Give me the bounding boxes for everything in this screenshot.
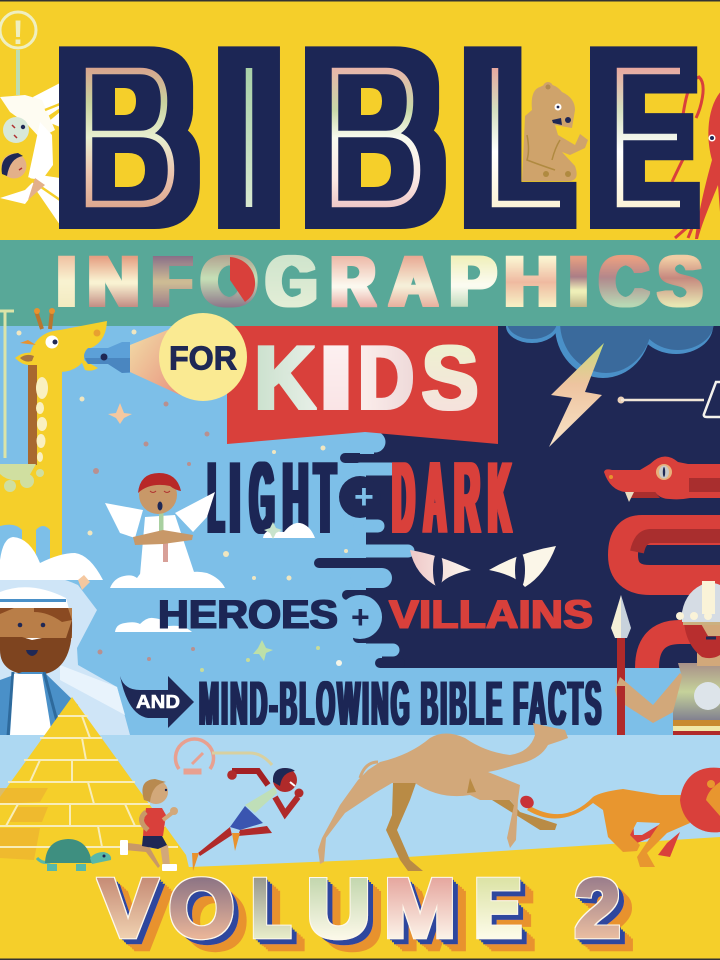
title: BIBLE: L [472,6,563,269]
illustration: turtle [37,839,111,871]
heading: INFOGRAPHICS: O [201,243,257,322]
heading: VOLUME 2: O [169,861,234,954]
icon: exclamation sign [0,12,36,95]
heading: KIDS: K [254,327,316,429]
icon: squid [672,77,720,239]
heading: INFOGRAPHICS: R [331,243,375,322]
title: BIBLE: B [312,6,436,269]
heading: INFOGRAPHICS: S [658,243,702,322]
illustration: small cloud with star [263,522,315,539]
plus sign: light and dark: + [354,478,374,516]
heading: INFOGRAPHICS: H [504,242,558,322]
heading: HEROES: HEROES [158,593,338,637]
heading: DARK: A [424,442,446,554]
illustration: pyramid [0,697,190,872]
heading: INFOGRAPHICS: P [450,241,496,321]
illustration: serpent [604,456,720,668]
heading: INFOGRAPHICS: I [57,241,76,321]
heading: KIDS [254,326,479,429]
badge: FOR [159,313,247,401]
illustration: boy running [120,779,178,871]
illustration: lion [518,768,720,867]
illustration: warrior and spear [611,581,720,736]
icon: exclamation sign: ! [12,14,24,52]
decoration: stars and dots [16,330,348,672]
heading: LIGHT [208,441,335,555]
heading: DARK [393,441,511,555]
background: yellow top [0,0,720,240]
arrow: AND [120,676,194,728]
heading: INFOGRAPHICS [57,241,702,322]
title inline strokes [89,68,680,207]
background: sky blue [0,326,720,736]
heading: INFOGRAPHICS: C [599,242,649,321]
illustration: pen and light beam [84,325,180,395]
title: BIBLE [66,6,687,269]
illustration: angels behind B [0,83,60,225]
icon: speedometer [176,739,272,773]
arrow: AND: AND [136,692,180,712]
heading: INFOGRAPHICS: N [88,243,139,322]
heading: VOLUME 2: 2 [574,862,621,954]
illustration: sprinter [192,768,304,871]
heading: LIGHT: T [315,441,335,554]
heading: KIDS: D [358,326,414,428]
title: BIBLE: E [599,8,687,269]
panel: dark side [319,326,720,668]
heading: VOLUME 2: M [384,861,456,954]
icon: bear [522,82,588,181]
heading: DARK: D [393,442,414,554]
illustration: cloud over Heroes [115,618,192,632]
heading: VOLUME 2: L [251,861,291,954]
icon: lightning bolt [549,343,604,447]
icon: pie slice in O [230,257,255,302]
plus sign: heroes and villains: + [351,599,370,635]
top edge line [0,0,720,2]
heading: KIDS: S [421,327,479,429]
heading: LIGHT: H [283,443,308,555]
heading: VOLUME 2: U [306,862,371,955]
heading: INFOGRAPHICS: A [390,242,437,322]
title: BIBLE: B [66,6,190,269]
heading: INFOGRAPHICS: G [266,243,317,322]
heading: KIDS: I [316,327,356,428]
illustration: giraffe [0,308,107,560]
badge: FOR: FOR [169,340,237,376]
illustration: camel [318,723,568,871]
heading: LIGHT: I [230,442,240,555]
heading: INFOGRAPHICS: I [569,241,588,321]
banner: KIDS [227,326,498,444]
heading: VOLUME 2 [99,861,621,955]
heading: DARK: K [488,441,511,554]
heading: DARK: R [454,443,480,555]
heading: INFOGRAPHICS: F [152,243,192,322]
title letter counters [115,88,391,187]
heading: VILLAINS: VILLAINS [389,593,593,637]
heading: MIND-BLOWING BIBLE FACTS: MIND-BLOWING BIBLE FACTS [199,669,601,740]
heading: LIGHT: G [250,441,274,554]
background: yellow ground [0,837,720,960]
title: BIBLE: I [224,7,274,269]
icon: triangle instrument [618,382,720,417]
illustration: thermometer line [0,310,14,458]
heading: LIGHT: L [208,441,224,554]
heading: VOLUME 2: V [99,863,157,955]
heading: VOLUME 2: E [474,863,522,955]
background: teal band [0,240,720,326]
illustration: Moses figure [0,537,130,736]
icon: storm cloud [506,326,714,378]
illustration: angel [105,473,225,588]
bottom edge line [0,958,720,960]
background: light blue lower band [0,735,720,870]
icon: villain eyes [410,546,556,588]
